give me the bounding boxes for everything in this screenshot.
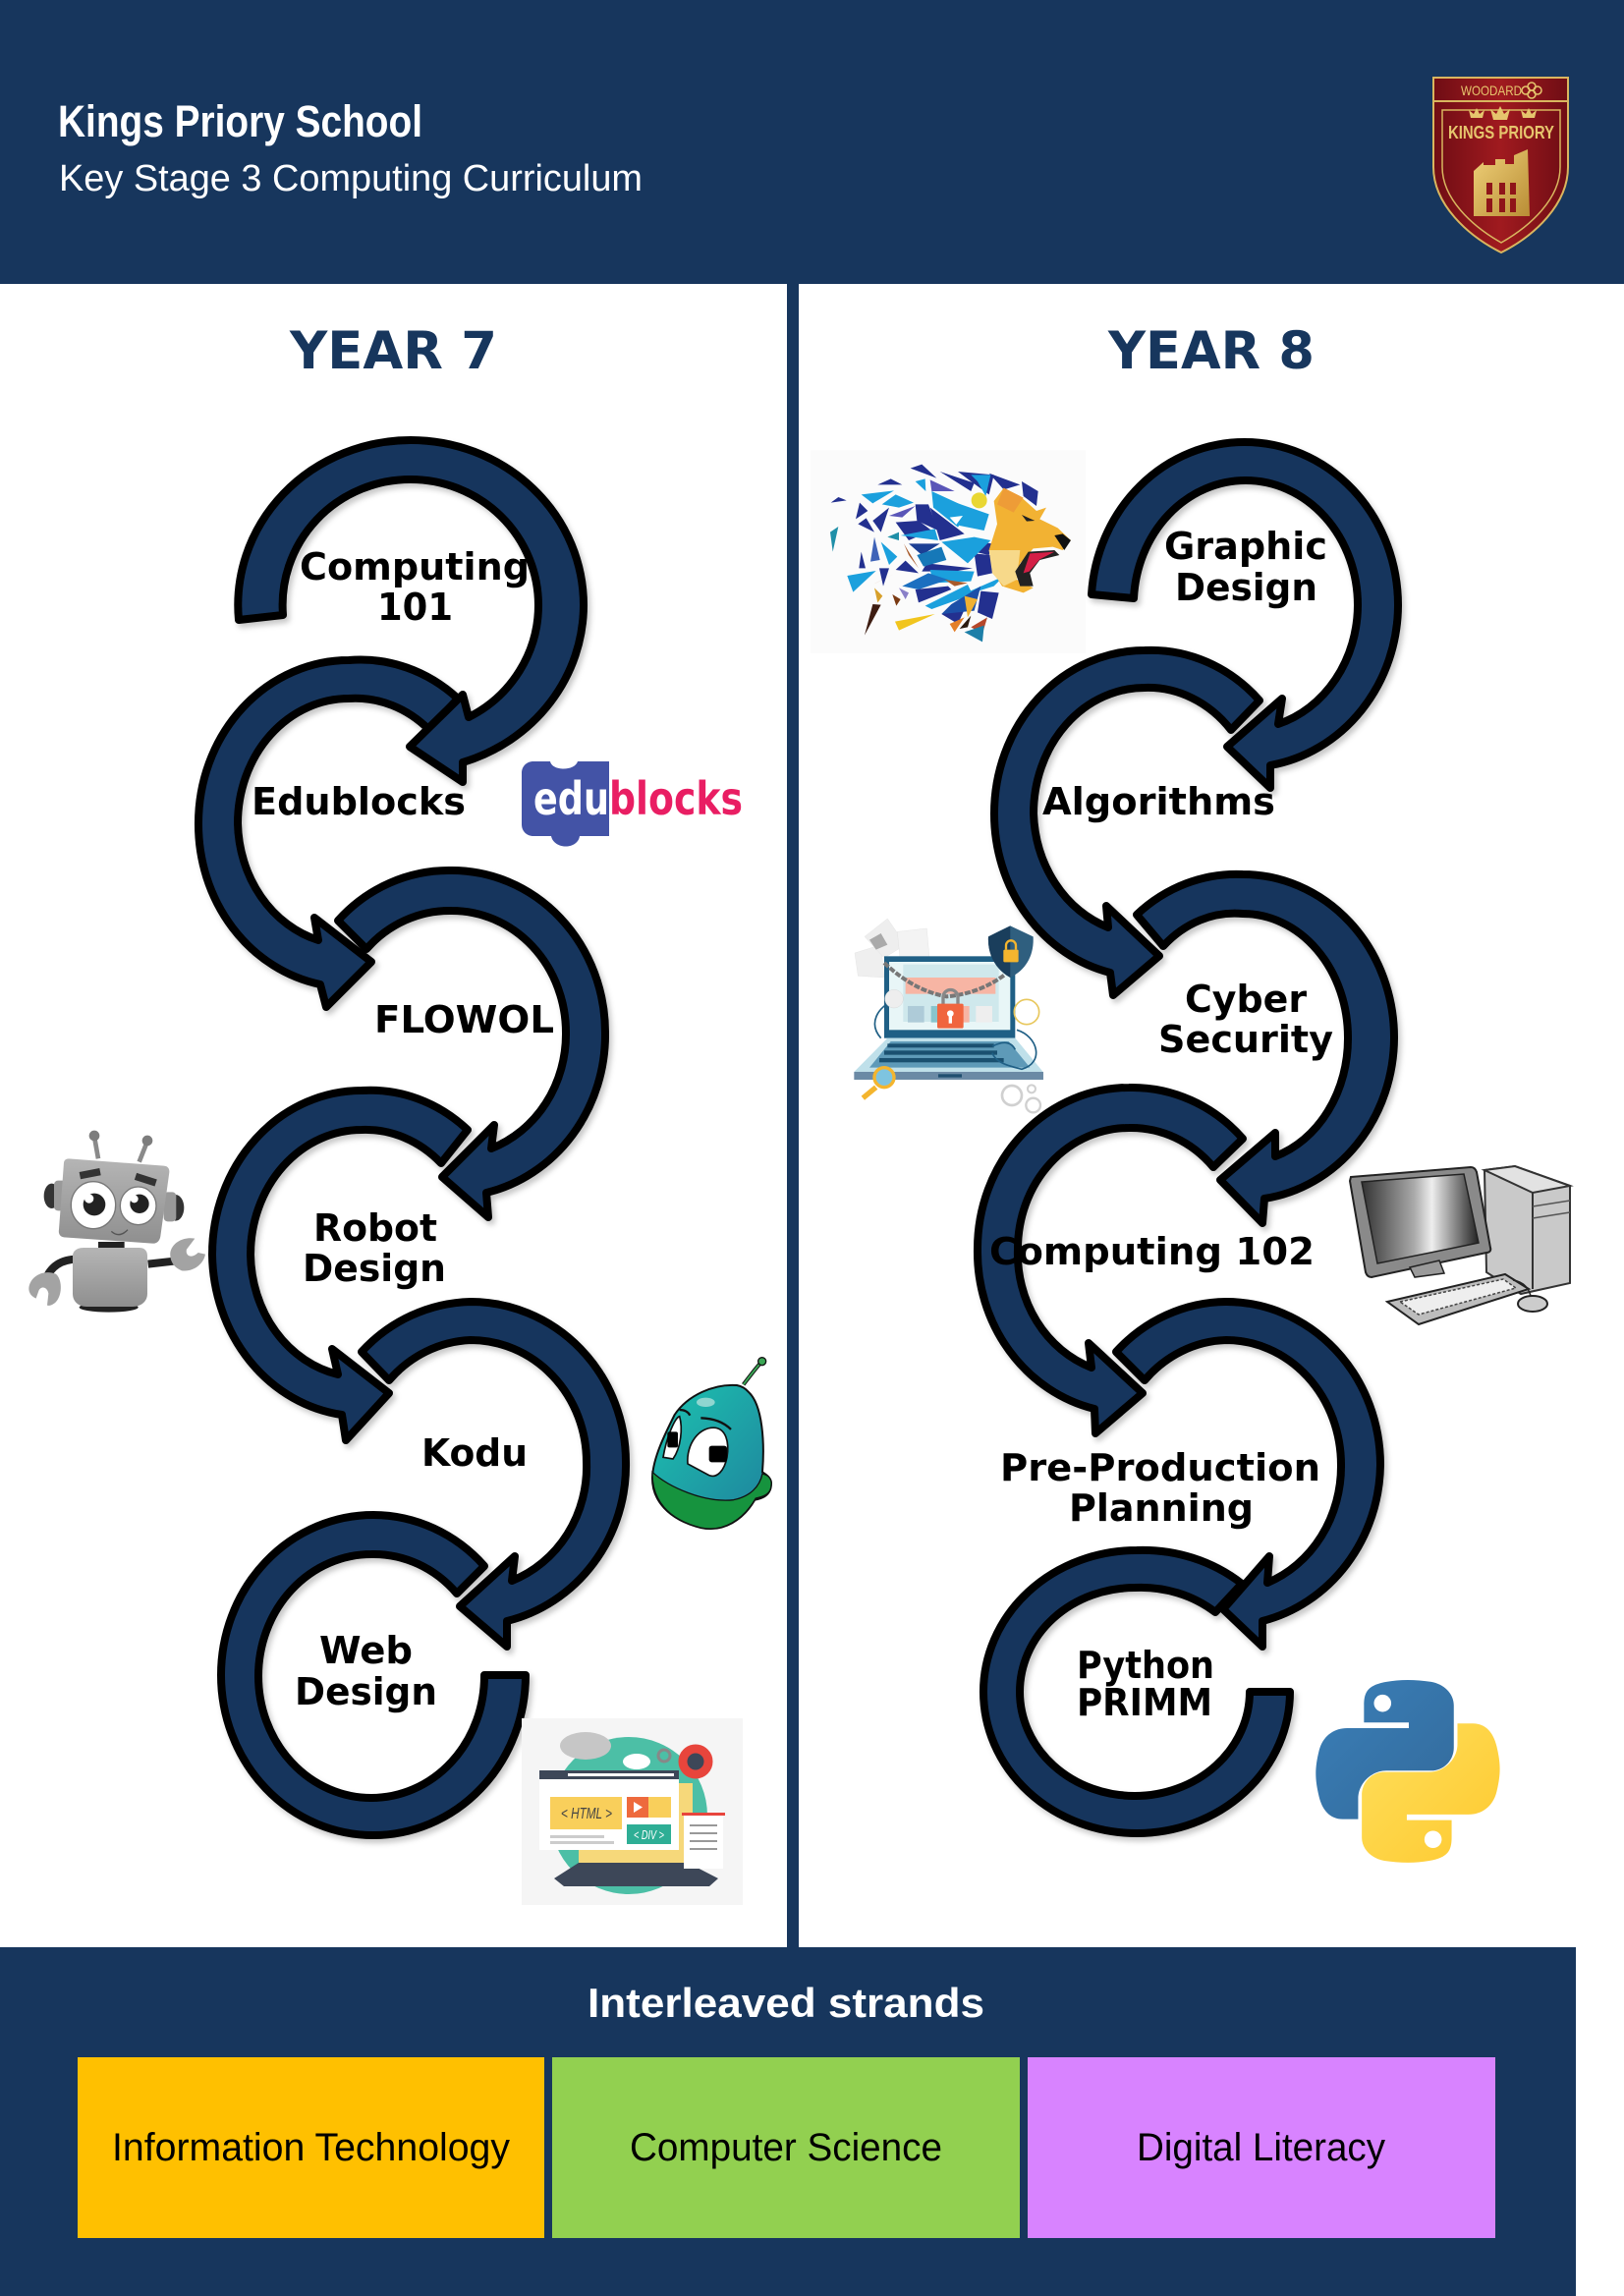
icon: cyber security laptop (854, 919, 1043, 1112)
strand: Digital Literacy (1028, 2057, 1495, 2238)
label: Pre-Production Planning (1000, 1446, 1320, 1530)
strand: Computer Science: Computer Science (630, 2126, 942, 2169)
heading: Year 8: YEAR 8 (1107, 321, 1315, 381)
label: Web Design: Web (319, 1629, 413, 1672)
column divider (787, 284, 799, 1949)
arrow: Computing 101 (238, 440, 584, 782)
label: Cyber Security (1158, 978, 1333, 1061)
label: Kodu: Kodu (421, 1431, 528, 1475)
icon: kodu character (652, 1358, 771, 1529)
arrow: Edublocks (198, 659, 458, 1007)
label: Graphic Design: Graphic (1164, 525, 1327, 568)
icon: edublocks logo: blocks (609, 772, 743, 825)
label: Python PRIMM: PRIMM (1077, 1681, 1212, 1724)
header band (0, 0, 1624, 284)
label: Graphic Design: Design (1175, 566, 1317, 609)
arrow: FLOWOL (338, 870, 605, 1217)
label: Web Design: Design (295, 1670, 437, 1713)
label: Python PRIMM (1077, 1644, 1214, 1724)
icon: web design laptop: < DIV > (634, 1827, 664, 1842)
label: Pre-Production Planning: Planning (1069, 1486, 1254, 1530)
icon: robot (28, 1131, 205, 1313)
panel: Year 7 arrow flow (198, 440, 626, 1835)
label: Cyber Security: Security (1158, 1018, 1333, 1061)
icon: edublocks logo (522, 761, 743, 847)
arrow: Robot Design (212, 1091, 468, 1440)
label: Edublocks: Edublocks (252, 780, 466, 823)
label: Robot Design (303, 1206, 446, 1290)
arrow: Algorithms (994, 650, 1260, 995)
arrow: Web Design (221, 1515, 526, 1835)
icon: desktop computer (1350, 1166, 1570, 1324)
strand: Computer Science (552, 2057, 1020, 2238)
label: Robot Design: Design (303, 1247, 446, 1290)
icon: school crest: WOODARD (1461, 83, 1522, 98)
arrow: Kodu (362, 1302, 626, 1647)
panel: Year 8 arrow flow (978, 442, 1398, 1833)
label: Graphic Design (1164, 525, 1327, 609)
icon: school crest: KINGS PRIORY (1448, 123, 1554, 142)
label: Computing 102: Computing 102 (989, 1230, 1315, 1273)
arrow: Python PRIMM (983, 1550, 1290, 1833)
label: Computing 101: Computing (300, 545, 530, 588)
strand: Digital Literacy: Digital Literacy (1137, 2126, 1385, 2169)
label: FLOWOL: FLOWOL (374, 998, 554, 1041)
icon: low-poly lion (811, 450, 1086, 653)
strand: Information Technology (78, 2057, 544, 2238)
label: Robot Design: Robot (313, 1206, 437, 1250)
icon: web design laptop: < HTML > (561, 1806, 612, 1822)
icon: web design laptop (522, 1718, 743, 1905)
label: Computing 101: 101 (377, 586, 453, 629)
arrow: Pre-Production Planning (1116, 1302, 1380, 1647)
label: Python PRIMM: Python (1077, 1644, 1214, 1687)
heading: interleaved strands: Interleaved strands (588, 1980, 984, 2026)
strand: Information Technology: Information Technology (112, 2126, 510, 2169)
label: Pre-Production Planning: Pre-Production (1000, 1446, 1320, 1489)
label: Web Design (295, 1629, 437, 1713)
arrow: Graphic Design (1092, 442, 1398, 788)
icon: school crest (1433, 78, 1568, 252)
label: Cyber Security: Cyber (1185, 978, 1307, 1021)
icon: edublocks logo: edu (533, 772, 609, 825)
label: Computing 101 (300, 545, 530, 629)
panel: interleaved strands (0, 1947, 1576, 2296)
title: Kings Priory School (58, 96, 422, 146)
arrow: Computing 102 (978, 1088, 1243, 1433)
arrow: Cyber Security (1137, 874, 1394, 1223)
icon: python logo (1316, 1680, 1500, 1863)
subtitle: Key Stage 3 Computing Curriculum (59, 158, 643, 199)
heading: Year 7: YEAR 7 (289, 321, 497, 381)
label: Algorithms: Algorithms (1042, 780, 1275, 823)
